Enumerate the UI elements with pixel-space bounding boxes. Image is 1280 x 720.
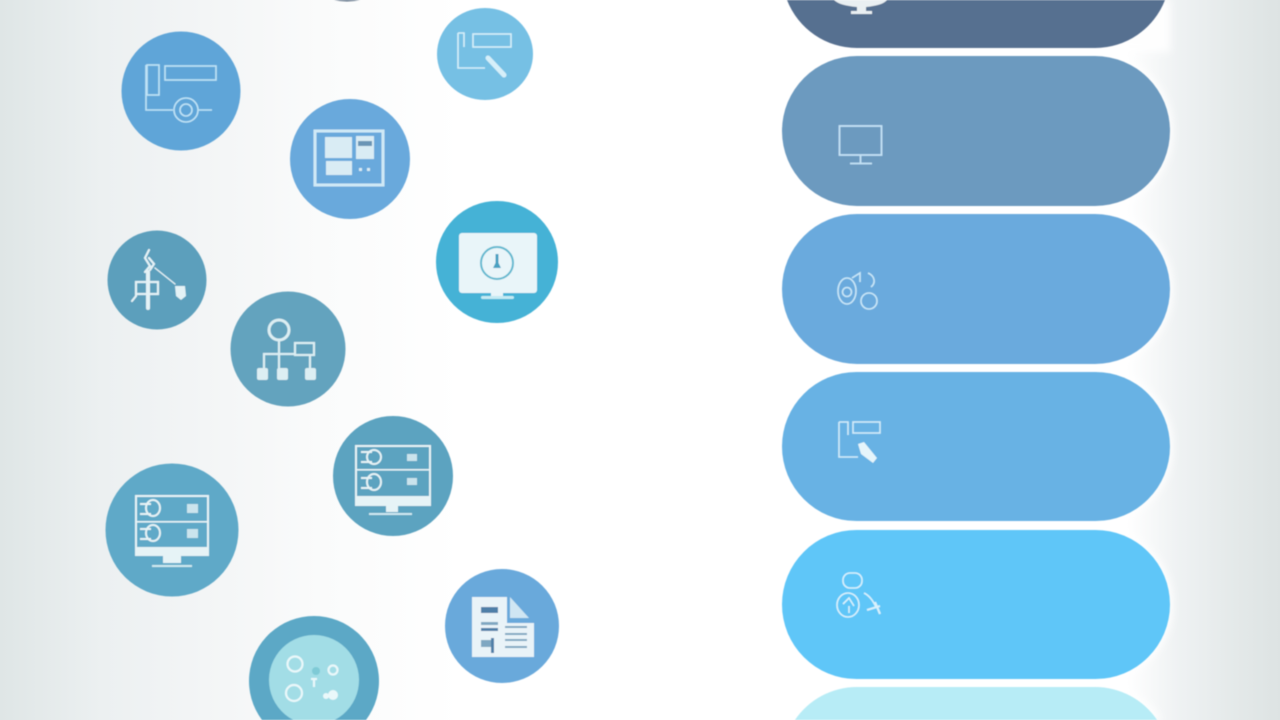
circle: partial top xyxy=(334,0,360,2)
icon: chart and pen xyxy=(839,422,880,457)
pill 6: pale aqua xyxy=(795,687,1157,720)
pill 1: dark slate xyxy=(787,0,1165,48)
icon circle: monitor with rows 1 xyxy=(333,416,453,536)
icon circle: branching tool xyxy=(108,230,206,330)
icon circle: chart with gauge xyxy=(122,32,240,150)
icon: head and tool xyxy=(837,573,880,617)
icon circle: pen and chart xyxy=(437,8,533,100)
icon: gears xyxy=(838,273,877,309)
icon circle: document xyxy=(445,569,559,683)
pill 5: sky blue xyxy=(782,530,1170,679)
icon circle: dashboard screen xyxy=(290,99,410,219)
pill 4: light blue xyxy=(782,372,1170,521)
icon circle: monitor with gauge xyxy=(436,201,558,323)
panel: icon circles xyxy=(106,0,559,720)
pill 2: steel blue xyxy=(782,56,1170,206)
icon circle: network tree xyxy=(230,292,346,406)
icon circle: monitor with rows 2 xyxy=(106,464,238,596)
icon circle: molecule nodes xyxy=(249,616,379,720)
panel: stacked pills xyxy=(782,0,1170,720)
pill 3: mid blue xyxy=(782,214,1170,364)
icon: monitor outline xyxy=(840,126,882,164)
icon: filled monitor xyxy=(834,0,887,14)
